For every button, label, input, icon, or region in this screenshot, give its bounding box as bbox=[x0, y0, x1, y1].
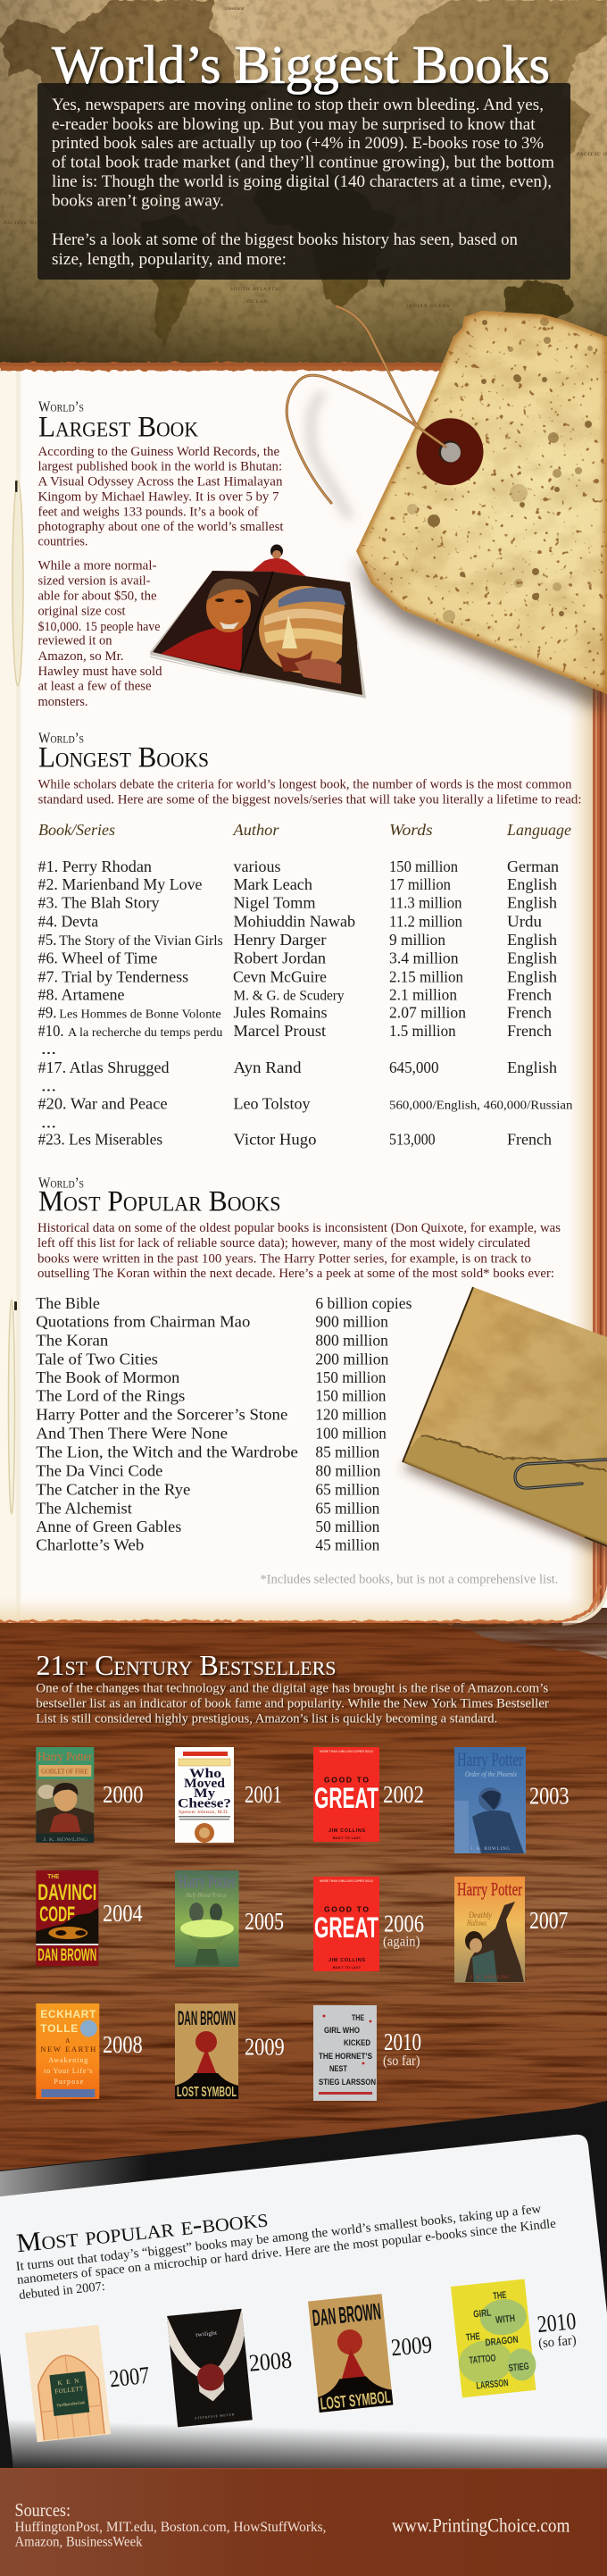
e-book year 2010 bbox=[536, 2307, 578, 2351]
table: longest books: 2.1 million bbox=[389, 985, 457, 1003]
e-book cover 2010: LARSSON bbox=[476, 2378, 509, 2392]
cover 2002: GREAT bbox=[314, 1782, 378, 1814]
year 2009: 2009 bbox=[245, 2034, 285, 2061]
table header bbox=[38, 821, 571, 839]
table: longest books: Marcel Proust bbox=[234, 1022, 326, 1040]
website url: www.PrintingChoice.com bbox=[392, 2514, 570, 2537]
year 2007: 2007 bbox=[529, 1907, 568, 1934]
popular books list bbox=[36, 1294, 412, 1554]
table: longest books: English bbox=[507, 931, 557, 949]
e-book year 2010: (so far) bbox=[537, 2332, 577, 2351]
popular books list: The Book of Mormon bbox=[36, 1368, 179, 1386]
notebook shadow bbox=[403, 1438, 607, 1556]
cover 2006: GREAT bbox=[314, 1911, 378, 1944]
table: longest books: 11.2 million bbox=[389, 912, 462, 930]
tag shadow bbox=[356, 563, 607, 713]
cover 2003: Harry Potter bbox=[457, 1748, 523, 1770]
body text: reviewed it on bbox=[37, 634, 112, 648]
e-book cover 2010: WITH bbox=[495, 2313, 516, 2326]
intro text: Historical data on some of the oldest popular books is inconsistent (Don Quixote, for example, was bbox=[37, 1221, 561, 1235]
popular books list: 200 million bbox=[315, 1351, 388, 1368]
table header: Book/Series bbox=[38, 821, 115, 839]
year 2010: 2010 bbox=[384, 2028, 421, 2055]
boy portrait bbox=[161, 625, 243, 671]
water stain bbox=[403, 1436, 607, 1543]
cover 2002: JIM COLLINS bbox=[328, 1828, 365, 1834]
table: longest books: 645,000 bbox=[389, 1058, 439, 1076]
cover 2005: Half-Blood Prince bbox=[185, 1892, 227, 1899]
cover 2004: CODE bbox=[39, 1903, 75, 1927]
table: longest books: English bbox=[507, 1058, 557, 1076]
cover 2010: THE bbox=[352, 2013, 364, 2023]
cover 2003 bbox=[454, 1747, 526, 1853]
e-book heading: Most popular e-books bbox=[15, 2203, 270, 2258]
table: longest books: English bbox=[507, 949, 557, 966]
table: longest books: #9. bbox=[37, 1003, 57, 1021]
e-reader device bbox=[0, 2101, 607, 2468]
year 2001: 2001 bbox=[245, 1781, 282, 1808]
cover 2008: ECKHART bbox=[40, 2008, 96, 2020]
popular books list: Quotations from Chairman Mao bbox=[36, 1313, 250, 1331]
intro text: line is: Though the world is going digital (140 characters at a time, even), bbox=[52, 173, 552, 191]
cover 2001: My bbox=[194, 1786, 216, 1801]
popular books list: And Then There Were None bbox=[36, 1425, 228, 1443]
heading: 21st Century Bestsellers bbox=[36, 1649, 336, 1681]
body text: Amazon, so Mr. bbox=[37, 649, 123, 664]
popular books list: 900 million bbox=[315, 1313, 388, 1331]
table: longest books: various bbox=[234, 857, 280, 875]
table: longest books: Ayn Rand bbox=[234, 1058, 302, 1076]
table: longest books: 2.15 million bbox=[389, 967, 463, 985]
table: longest books: ... bbox=[41, 1077, 56, 1095]
popular books list: 65 million bbox=[315, 1480, 379, 1498]
body text: countries. bbox=[37, 535, 87, 549]
table: longest books: French bbox=[507, 1003, 552, 1021]
table: longest books: The Story of the Vivian Girls bbox=[59, 933, 223, 949]
year 2008: 2008 bbox=[103, 2031, 143, 2058]
table: longest books: 513,000 bbox=[389, 1131, 436, 1149]
table header: Words bbox=[389, 821, 433, 839]
popular books list: Tale of Two Cities bbox=[36, 1351, 158, 1368]
popular books list: 150 million bbox=[315, 1368, 386, 1386]
table: longest books: Victor Hugo bbox=[234, 1131, 316, 1149]
cover 2008: Awakening bbox=[48, 2056, 87, 2064]
kicker: World’s bbox=[38, 398, 84, 415]
body text: able for about $50, the bbox=[37, 590, 157, 604]
tag edge burn bbox=[356, 311, 607, 694]
year 2005: 2005 bbox=[245, 1908, 284, 1935]
table: longest books: English bbox=[507, 894, 557, 912]
intro text: printed book sales are actually up too (+4% in 2009). E-books rose to 3% bbox=[52, 135, 544, 153]
footnote: *Includes selected books, but is not a comprehensive list. bbox=[260, 1573, 558, 1587]
cover 2006: BUILT TO LAST bbox=[333, 1966, 362, 1970]
footer bbox=[0, 2468, 607, 2576]
table: longest books: #2. Marienband My Love bbox=[37, 875, 202, 893]
table: longest books: English bbox=[507, 967, 557, 985]
e-book cover 2010: THE bbox=[493, 2290, 507, 2302]
cover 2001: Moved bbox=[184, 1777, 225, 1791]
section: world's longest books bbox=[37, 730, 582, 1149]
body text: While a more normal- bbox=[37, 558, 157, 573]
cover 2004 bbox=[36, 1870, 98, 1966]
intro text: books were written in the past 100 years. The Harry Potter series, for example, is on track to bbox=[37, 1251, 531, 1266]
table: longest books: #4. Devta bbox=[37, 912, 98, 930]
popular books list: Anne of Green Gables bbox=[36, 1518, 181, 1535]
paperclip bbox=[515, 1459, 607, 1488]
table: longest books: #1. Perry Rhodan bbox=[37, 857, 152, 875]
cover 2000: GOBLET OF FIRE bbox=[41, 1769, 87, 1776]
popular books list: 45 million bbox=[315, 1536, 379, 1554]
e-book intro text: nanometers of space on a microchip or hard drive. Here are the most popular e-books since the Kindle bbox=[16, 2217, 557, 2287]
open book page bbox=[0, 363, 607, 1670]
e-book year 2009: 2009 bbox=[390, 2330, 433, 2361]
body text: $10,000. 15 people have bbox=[37, 620, 161, 634]
cover 2008: TOLLE bbox=[40, 2022, 78, 2035]
header map background: SOUTH ATLANTIC bbox=[230, 287, 282, 292]
cover 2002: MORE THAN 4 MILLION COPIES SOLD bbox=[320, 1750, 373, 1753]
cover 2004: DAVINCI bbox=[37, 1880, 96, 1905]
e-book intro text: It turns out that today’s “biggest” books may be among the world’s smallest books, taking up a few bbox=[15, 2202, 543, 2274]
cover 2010: THE HORNET’S bbox=[319, 2052, 372, 2062]
body text: A Visual Odyssey Across the Last Himalayan bbox=[37, 475, 283, 489]
e-book cover 2007: KEN bbox=[57, 2378, 79, 2387]
cover 2000: J. K. ROWLING bbox=[43, 1838, 88, 1843]
table: longest books: French bbox=[507, 1131, 552, 1149]
table: longest books: 1.5 million bbox=[389, 1022, 456, 1040]
table: longest books: Cevn McGuire bbox=[233, 967, 327, 985]
child bbox=[252, 545, 307, 577]
intro text: outselling The Koran within the next decade. Here’s a peek at some of the most sold* books ever: bbox=[37, 1267, 554, 1281]
header map background: PACIFIC OCEAN bbox=[3, 221, 51, 226]
body text bbox=[37, 445, 284, 709]
cover 2007 bbox=[454, 1877, 525, 1983]
cover 2007: J. K. ROWLING bbox=[470, 1976, 510, 1980]
popular books list: The Da Vinci Code bbox=[36, 1462, 162, 1480]
icon: parchment tag bbox=[348, 304, 607, 701]
table: longest books: Urdu bbox=[507, 912, 542, 930]
year 2010: (so far) bbox=[383, 2053, 420, 2069]
cover 2005: Harry Potter bbox=[179, 1872, 236, 1892]
year 2010 bbox=[383, 2028, 421, 2069]
e-book cover 2007 bbox=[25, 2325, 111, 2442]
e-book cover 2007: The Pillars of the Earth bbox=[56, 2400, 86, 2408]
e-book cover 2010: DRAGON bbox=[485, 2335, 519, 2348]
intro text bbox=[36, 1682, 549, 1727]
e-book cover 2008: twilight bbox=[195, 2330, 218, 2338]
e-book intro text: debuted in 2007: bbox=[18, 2279, 106, 2303]
e-book cover 2010: THE bbox=[465, 2331, 481, 2344]
icon: giant open book with child bbox=[150, 545, 366, 698]
cover 2001: Who bbox=[189, 1767, 221, 1781]
table: longest books: #3. The Blah Story bbox=[37, 894, 159, 912]
table: longest books: 3.4 million bbox=[389, 949, 459, 966]
table: longest books: M. & G. de Scudery bbox=[234, 988, 345, 1003]
cover 2010: KICKED bbox=[344, 2038, 370, 2048]
heading: Longest Books bbox=[38, 741, 209, 774]
intro text: One of the changes that technology and the digital age has brought is the rise of Amazon.com’s bbox=[36, 1682, 548, 1696]
kicker: World’s bbox=[38, 1174, 84, 1191]
map continents bbox=[0, 0, 607, 344]
table: longest books: #20. War and Peace bbox=[37, 1095, 168, 1113]
sources list bbox=[14, 2520, 327, 2550]
cover 2006: JIM COLLINS bbox=[328, 1958, 365, 1963]
table: longest books: French bbox=[507, 1022, 552, 1040]
year 2006: (again) bbox=[383, 1935, 420, 1950]
cover 2010: STIEG LARSSON bbox=[319, 2078, 376, 2087]
tag eyelet bbox=[416, 418, 484, 485]
intro text: While scholars debate the criteria for world’s longest book, the number of words is the most common bbox=[37, 777, 572, 791]
cover 2002: GOOD TO bbox=[324, 1776, 369, 1785]
e-book cover 2010: STIEG bbox=[508, 2361, 529, 2374]
body text: original size cost bbox=[37, 605, 126, 619]
table: longest books: Robert Jordan bbox=[234, 949, 326, 966]
kicker: World’s bbox=[38, 730, 84, 747]
cover 2009: LOST SYMBOL bbox=[177, 2085, 237, 2100]
cover 2006: MORE THAN 4 MILLION COPIES SOLD bbox=[320, 1879, 373, 1883]
intro text: books aren’t going away. bbox=[52, 193, 224, 211]
year 2006: 2006 bbox=[384, 1910, 424, 1936]
intro text: Yes, newspapers are moving online to stop their own bleeding. And yes, bbox=[52, 96, 544, 114]
table header: Language bbox=[506, 821, 571, 839]
popular books list: 800 million bbox=[315, 1332, 388, 1350]
popular books list: 50 million bbox=[315, 1518, 379, 1535]
cover 2008: A bbox=[65, 2037, 70, 2045]
binding stitches bbox=[9, 481, 23, 1514]
sources heading: Sources: bbox=[14, 2499, 71, 2521]
sources list: HuffingtonPost, MIT.edu, Boston.com, HowStuffWorks, bbox=[14, 2520, 327, 2535]
e-book cover 2009: DAN BROWN bbox=[311, 2297, 382, 2331]
table: longest books: #6. Wheel of Time bbox=[37, 949, 158, 966]
table: longest books: A la recherche du temps perdu bbox=[68, 1026, 222, 1040]
intro text: size, length, popularity, and more: bbox=[52, 251, 287, 269]
popular books list: 6 billion copies bbox=[315, 1294, 412, 1312]
body text: Kingom by Michael Hawley. It is over 5 by 7 bbox=[37, 489, 279, 504]
cover 2001: Cheese? bbox=[178, 1797, 231, 1811]
year 2000: 2000 bbox=[103, 1781, 143, 1808]
title: World’s Biggest Books bbox=[52, 36, 550, 95]
table: longest books: #8. Artamene bbox=[37, 985, 125, 1003]
e-book year 2008: 2008 bbox=[248, 2346, 293, 2377]
cover 2006 bbox=[313, 1877, 379, 1971]
table: longest books: 17 million bbox=[389, 875, 451, 893]
cover 2002 bbox=[313, 1747, 379, 1842]
cover 2004: DAN BROWN bbox=[37, 1946, 96, 1965]
popular books list: 85 million bbox=[315, 1443, 379, 1461]
body text: feet and weighs 133 pounds. It’s a book of bbox=[37, 505, 259, 519]
intro text bbox=[52, 96, 555, 269]
popular books list: The Alchemist bbox=[36, 1499, 132, 1517]
popular books list: Charlotte’s Web bbox=[36, 1536, 144, 1554]
cover 2004: THE bbox=[47, 1874, 60, 1880]
cover 2001: Spencer Johnson, M.D. bbox=[179, 1810, 229, 1815]
intro text bbox=[37, 777, 582, 807]
table: longest books: French bbox=[507, 985, 552, 1003]
section: 21st century bestsellers bbox=[36, 1649, 570, 2101]
cover 2001 bbox=[175, 1747, 234, 1843]
popular books list: 120 million bbox=[315, 1406, 387, 1424]
intro text: left off this list for lack of reliable source data); however, many of the most widely circulated bbox=[37, 1236, 530, 1250]
body text: at least a few of these bbox=[37, 680, 152, 694]
e-book cover 2008: STEPHENIE MEYER bbox=[195, 2413, 235, 2420]
header map background bbox=[0, 0, 607, 365]
table: longest books: 560,000/English, 460,000/Russian bbox=[389, 1100, 573, 1113]
heading: Most Popular Books bbox=[38, 1186, 280, 1218]
table: longest books: Mark Leach bbox=[234, 875, 312, 893]
e-book cover 2007: FOLLETT bbox=[54, 2385, 84, 2396]
year 2006 bbox=[383, 1910, 424, 1950]
table: longest books: Henry Darger bbox=[234, 931, 327, 949]
intro text: bestseller list as an indicator of book fame and popularity. While the New York Times Bestseller bbox=[36, 1696, 549, 1710]
table: longest books: Leo Tolstoy bbox=[234, 1095, 311, 1113]
table: longest books: Nigel Tomm bbox=[234, 894, 316, 912]
table: longest books: #17. Atlas Shrugged bbox=[37, 1058, 170, 1076]
cover 2010: NEST bbox=[329, 2064, 347, 2074]
table: longest books: ... bbox=[41, 1114, 56, 1132]
device frame bbox=[0, 2101, 607, 2468]
table: longest books: #10. bbox=[37, 1022, 64, 1040]
sources list: Amazon, BusinessWeek bbox=[14, 2535, 143, 2550]
frame highlight bbox=[0, 2155, 147, 2196]
intro dark panel bbox=[37, 83, 570, 280]
table: longest books: 150 million bbox=[389, 857, 458, 875]
table: longest books: #5. bbox=[37, 931, 57, 949]
section: 21st century bestsellers: DAN BROWN bbox=[178, 2007, 236, 2029]
table: longest books: Les Hommes de Bonne Volonte bbox=[59, 1007, 221, 1020]
cover 2005 bbox=[175, 1870, 239, 1967]
table: longest books: #7. Trial by Tenderness bbox=[37, 967, 188, 985]
table: longest books: German bbox=[507, 857, 559, 875]
year 2002: 2002 bbox=[383, 1781, 424, 1808]
popular books list: 65 million bbox=[315, 1499, 379, 1517]
section: world's largest book bbox=[37, 398, 284, 709]
body text: According to the Guiness World Records, the bbox=[37, 445, 279, 459]
cover 2007: Harry Potter bbox=[457, 1878, 522, 1900]
table: longest books: 2.07 million bbox=[389, 1003, 466, 1021]
cover 2007: Hallows bbox=[466, 1919, 486, 1928]
cover 2006: GOOD TO bbox=[324, 1904, 369, 1913]
intro text: standard used. Here are some of the biggest novels/series that will take you literally a lifetime to read: bbox=[37, 792, 582, 807]
cover 2010: GIRL WHO bbox=[324, 2026, 360, 2036]
intro text: of total book trade market (and they’ll continue growing), but the bottom bbox=[52, 155, 555, 172]
table: longest books bbox=[37, 857, 573, 1149]
body text: monsters. bbox=[37, 695, 87, 709]
table: longest books: English bbox=[507, 875, 557, 893]
cover 2003: J. K. ROWLING bbox=[470, 1847, 510, 1852]
popular books list: Harry Potter and the Sorcerer’s Stone bbox=[36, 1406, 287, 1424]
intro text: List is still considered highly prestigious, Amazon’s list is quickly becoming a standard. bbox=[36, 1712, 497, 1727]
cover 2000 bbox=[36, 1747, 94, 1843]
body text: largest published book in the world is Bhutan: bbox=[37, 460, 282, 474]
cover 2003: Order of the Phoenix bbox=[465, 1770, 517, 1778]
popular books list: The Koran bbox=[36, 1332, 108, 1350]
table: longest books: 11.3 million bbox=[389, 894, 462, 912]
tag stain spots bbox=[407, 317, 593, 623]
wood background bbox=[0, 1623, 607, 2179]
body text: Hawley must have sold bbox=[37, 665, 162, 679]
table: longest books: Jules Romains bbox=[234, 1003, 327, 1021]
string shadow bbox=[311, 393, 350, 518]
body text: sized version is avail- bbox=[37, 574, 150, 589]
popular books list: 150 million bbox=[315, 1387, 386, 1405]
popular books list: The Lord of the Rings bbox=[36, 1387, 185, 1405]
body text: photography about one of the world’s smallest bbox=[37, 520, 284, 534]
icon: aged notebook with paperclip bbox=[393, 1286, 607, 1550]
cover 2008: to Your Life’s bbox=[44, 2067, 92, 2075]
cover 2002: BUILT TO LAST bbox=[333, 1836, 362, 1840]
cover 2000: Harry Potter bbox=[37, 1751, 93, 1764]
table: longest books: 9 million bbox=[389, 931, 445, 949]
e-book cover 2009 bbox=[308, 2294, 394, 2414]
e-book cover 2010 bbox=[451, 2279, 538, 2397]
table: longest books: #23. Les Miserables bbox=[37, 1131, 162, 1149]
intro text bbox=[37, 1221, 561, 1281]
cover 2009 bbox=[175, 2003, 238, 2100]
cover 2008: NEW EARTH bbox=[40, 2045, 96, 2053]
cover 2008 bbox=[36, 2003, 99, 2099]
header map background: INDIAN OCEAN bbox=[405, 304, 451, 309]
e-book cover 2010: GIRL bbox=[473, 2308, 492, 2321]
cover 2008: Purpose bbox=[54, 2078, 84, 2086]
popular books list: 80 million bbox=[315, 1462, 380, 1480]
table: longest books: Mohiuddin Nawab bbox=[234, 912, 355, 930]
year 2004: 2004 bbox=[103, 1900, 143, 1927]
mask portrait bbox=[259, 586, 352, 673]
device screen bbox=[0, 2135, 607, 2468]
icon: string bbox=[287, 306, 445, 503]
e-book year 2007: 2007 bbox=[108, 2362, 151, 2392]
header map background: OCEAN bbox=[247, 299, 268, 305]
header map background: Greenland bbox=[225, 7, 245, 12]
intro text: e-reader books are blowing up. But you may be surprised to know that bbox=[52, 116, 536, 134]
e-book intro text bbox=[15, 2202, 557, 2303]
e-book cover 2010: TATTOO bbox=[469, 2353, 496, 2366]
screen bottom shadow bbox=[5, 2412, 607, 2468]
e-book year 2010: 2010 bbox=[536, 2307, 578, 2338]
popular books list: The Catcher in the Rye bbox=[36, 1480, 190, 1498]
section: world's most popular books bbox=[36, 1174, 561, 1587]
e-book cover 2008 bbox=[167, 2309, 253, 2427]
popular books list: 100 million bbox=[315, 1425, 387, 1443]
cover 2007: Deathly bbox=[468, 1911, 492, 1919]
popular books list: The Lion, the Witch and the Wardrobe bbox=[36, 1443, 298, 1461]
intro text: Here’s a look at some of the biggest books history has seen, based on bbox=[52, 231, 518, 249]
heading: Largest Book bbox=[38, 411, 198, 443]
year 2003: 2003 bbox=[529, 1783, 570, 1810]
cover 2010 bbox=[313, 2005, 377, 2101]
e-book cover 2009: LOST SYMBOL bbox=[320, 2388, 392, 2414]
popular books list: The Bible bbox=[36, 1294, 100, 1312]
table header: Author bbox=[232, 821, 279, 839]
table: longest books: ... bbox=[41, 1040, 56, 1058]
